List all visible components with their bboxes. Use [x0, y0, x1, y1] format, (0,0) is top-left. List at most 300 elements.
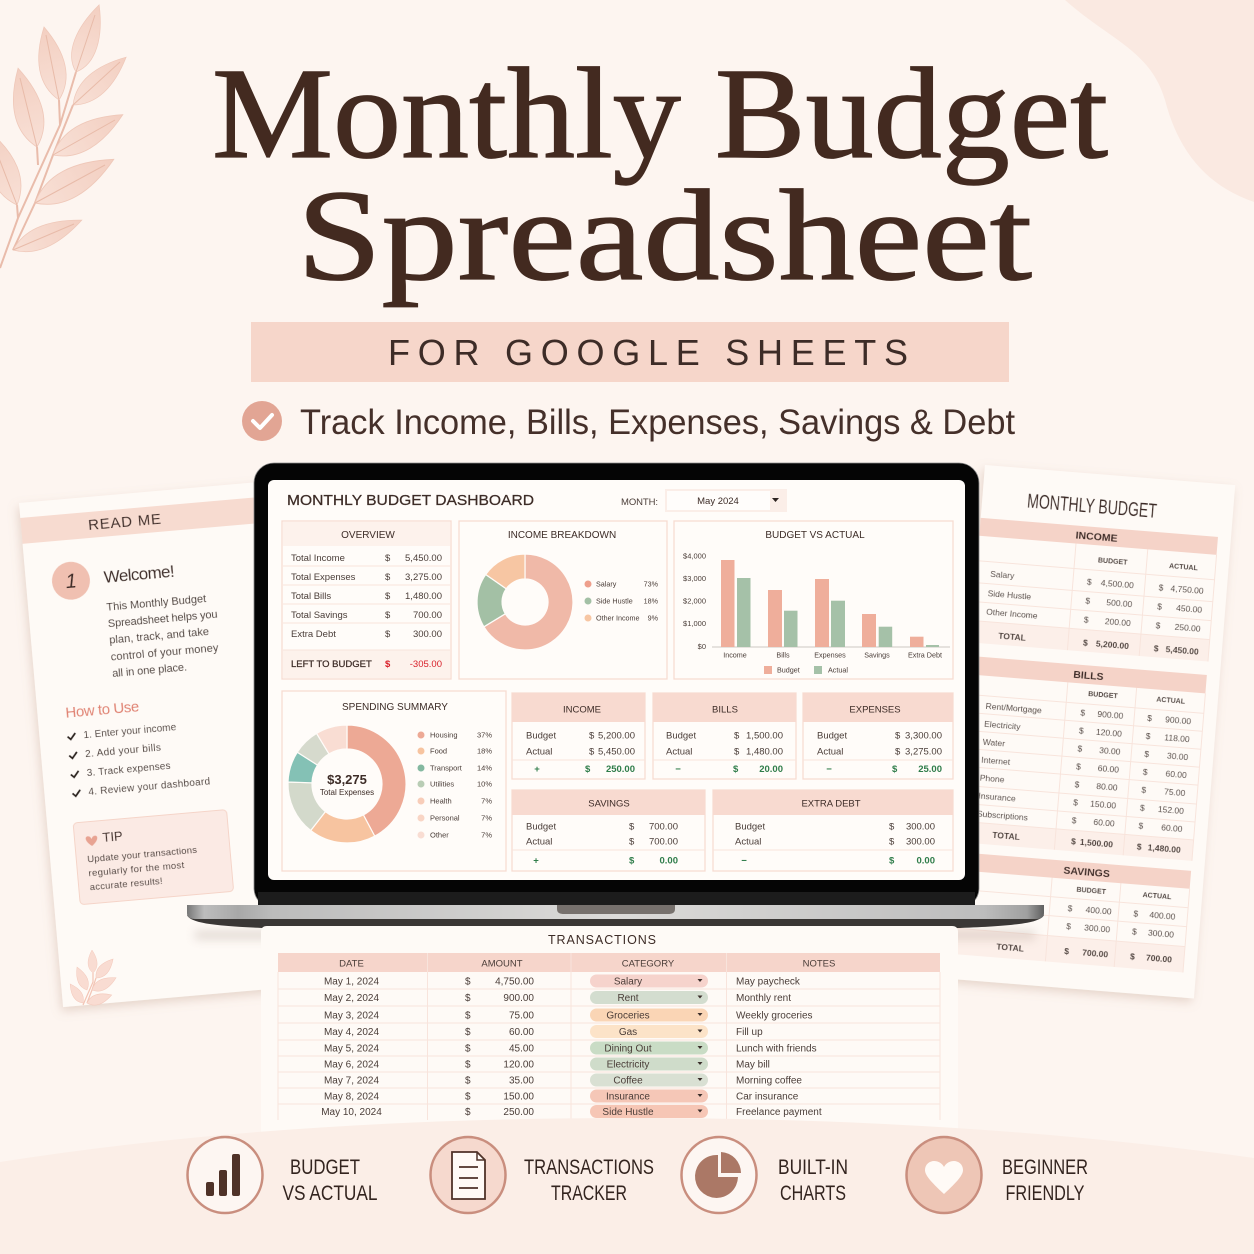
- table: income: ACTUAL: [1169, 563, 1199, 572]
- table: bills: Rent/Mortgage: [985, 701, 1042, 715]
- card: extra debt: 300.00: [906, 836, 935, 848]
- transaction rows: Morning coffee: [736, 1076, 802, 1086]
- panel: income breakdown: INCOME BREAKDOWN: [508, 530, 616, 541]
- table: bills: Insurance: [978, 791, 1016, 804]
- panel: overview: Extra Debt: [291, 629, 336, 640]
- panel: overview: 1,480.00: [405, 591, 442, 602]
- table: income: Salary: [990, 569, 1015, 581]
- table: bills: BUDGET: [1088, 691, 1119, 700]
- icon: leaf branch top left: [0, 1, 134, 268]
- subtitle banner: [251, 322, 1009, 382]
- card: expenses: −: [826, 764, 832, 775]
- panel: read me sheet: 1: [65, 570, 78, 593]
- donut chart: income: [477, 554, 573, 650]
- table: bills: 60.00: [1161, 822, 1183, 834]
- transaction rows: Fill up: [736, 1027, 763, 1038]
- card: bills: $: [733, 764, 739, 775]
- table: savings: BUDGET: [1076, 887, 1107, 896]
- table: bills: $: [1079, 725, 1084, 736]
- transaction rows: 4,750.00: [495, 976, 534, 988]
- card: savings: Actual: [526, 836, 552, 848]
- card: savings: $: [629, 822, 635, 832]
- month selector: MONTH:: [621, 497, 658, 508]
- table: bills: 1,500.00: [1080, 837, 1114, 849]
- table: bills: 900.00: [1097, 709, 1124, 721]
- callout: tip: accurate results!: [89, 876, 163, 893]
- legend: spending: 37%: [477, 730, 492, 740]
- transaction rows: 120.00: [503, 1060, 534, 1070]
- transaction rows: [321, 976, 822, 1118]
- text block: welcome paragraph: all in one place.: [112, 662, 187, 680]
- legend: spending: 7%: [481, 796, 492, 806]
- panel: budget vs actual bar chart: [674, 521, 953, 679]
- feature: built-in charts: [682, 1137, 848, 1213]
- feature: budget vs actual: VS ACTUAL: [282, 1182, 378, 1205]
- text block: welcome paragraph: This Monthly Budget: [106, 593, 207, 614]
- legend: income: 9%: [648, 614, 659, 622]
- transaction rows: Insurance: [606, 1092, 650, 1102]
- card: extra debt: 0.00: [916, 856, 935, 866]
- panel: income breakdown: [459, 521, 667, 679]
- panel: budget vs actual bar chart: BUDGET VS ACTUAL: [765, 530, 865, 541]
- card: income: $: [589, 746, 595, 758]
- table: savings: $: [1066, 921, 1072, 931]
- table: income: $: [1153, 643, 1159, 654]
- table: savings: TOTAL: [996, 941, 1024, 954]
- legend: spending: Utilities: [430, 780, 454, 788]
- transaction rows: Groceries: [606, 1010, 650, 1022]
- laptop: [187, 463, 1044, 939]
- panel: budget vs actual bar chart: $4,000: [683, 552, 706, 560]
- card: extra debt: −: [741, 856, 747, 866]
- panel: transactions sheet: CATEGORY: [622, 958, 675, 970]
- legend: spending: 7%: [481, 830, 492, 840]
- table: bills: 60.00: [1093, 817, 1115, 829]
- transaction rows: May 2, 2024: [324, 993, 379, 1004]
- panel: overview: $: [385, 629, 391, 640]
- table: bills: Subscriptions: [977, 808, 1028, 823]
- legend: spending: Food: [430, 746, 447, 756]
- text block: welcome paragraph: control of your money: [110, 642, 219, 664]
- table: bills: $: [1140, 803, 1145, 813]
- card: income: 250.00: [606, 764, 635, 775]
- card: expenses: Actual: [817, 746, 843, 758]
- card: bills: 20.00: [759, 764, 783, 775]
- table: bills: $: [1073, 797, 1079, 808]
- panel: transactions sheet: AMOUNT: [481, 958, 523, 970]
- legend: spending: 10%: [477, 780, 492, 788]
- icon: document: [430, 1137, 506, 1213]
- table: bills: Internet: [981, 755, 1011, 767]
- icon: bar chart: [188, 1137, 262, 1213]
- panel: overview: $: [385, 610, 391, 621]
- transaction rows: $: [465, 1027, 471, 1038]
- table: bills: 60.00: [1165, 768, 1187, 780]
- category pills: [590, 974, 708, 1118]
- table: savings: 400.00: [1149, 910, 1176, 922]
- panel: overview: $: [385, 591, 391, 602]
- table: bills: TOTAL: [992, 830, 1020, 842]
- panel: transactions sheet: DATE: [339, 958, 364, 970]
- table: income: $: [1085, 596, 1091, 606]
- panel: overview: 700.00: [413, 610, 442, 621]
- table: bills: $: [1074, 779, 1080, 790]
- card: expenses: $: [895, 730, 901, 742]
- card: expenses: 3,300.00: [905, 730, 942, 742]
- icon: heart: [906, 1137, 982, 1213]
- table: income: $: [1087, 577, 1092, 587]
- panel: read me sheet: How to Use: [65, 698, 140, 722]
- panel: spending summary: SPENDING SUMMARY: [342, 702, 448, 713]
- panel: overview: $: [385, 572, 391, 583]
- bars: budget: [721, 560, 924, 647]
- table: bills: 900.00: [1165, 714, 1192, 726]
- table: bills: $: [1071, 815, 1077, 825]
- transaction rows: May 7, 2024: [324, 1076, 379, 1086]
- table: savings: 700.00: [1146, 953, 1173, 965]
- table: bills: 118.00: [1164, 732, 1190, 744]
- callout: tip: regularly for the most: [88, 860, 185, 879]
- transaction rows: May 6, 2024: [324, 1060, 379, 1070]
- panel: overview: Total Income: [291, 553, 345, 564]
- transaction rows: May 4, 2024: [324, 1027, 379, 1038]
- transaction rows: 45.00: [509, 1044, 534, 1054]
- card: extra debt: EXTRA DEBT: [801, 798, 861, 810]
- card: income: $: [589, 730, 595, 742]
- laptop base: [187, 905, 1044, 928]
- table: bills: $: [1076, 761, 1082, 772]
- card: bills: 1,500.00: [746, 730, 783, 742]
- transaction rows: 35.00: [509, 1076, 534, 1086]
- table: bills: 75.00: [1164, 786, 1186, 798]
- legend: spending: Other: [430, 830, 449, 840]
- legend: spending: 7%: [481, 814, 492, 822]
- transaction rows: 250.00: [503, 1107, 534, 1118]
- checklist: 3. Track expenses: [86, 761, 171, 779]
- feature: budget vs actual: BUDGET: [290, 1156, 360, 1179]
- legend: spending: Housing: [430, 730, 458, 740]
- legend: income: [584, 580, 659, 622]
- card: expenses: 3,275.00: [905, 746, 942, 758]
- card: expenses: $: [892, 764, 898, 775]
- transaction rows: Rent: [617, 993, 639, 1004]
- panel: spending summary: $3,275: [327, 772, 367, 787]
- panel: monthly budget sheet: [944, 465, 1235, 998]
- transaction rows: Side Hustle: [602, 1107, 654, 1118]
- title: [212, 42, 1108, 308]
- panel: monthly budget sheet: MONTHLY BUDGET: [1026, 491, 1158, 523]
- card: savings: $: [629, 836, 635, 848]
- card: bills: $: [734, 746, 740, 758]
- transaction rows: $: [465, 1010, 471, 1022]
- card: income: +: [534, 764, 540, 775]
- card: income: [512, 693, 645, 779]
- panel: overview: Total Bills: [291, 591, 331, 602]
- transaction rows: Salary: [614, 976, 642, 988]
- legend: spending: 18%: [477, 746, 492, 756]
- table: bills: 120.00: [1096, 727, 1123, 739]
- panel: budget vs actual bar chart: Expenses: [814, 650, 846, 660]
- text block: welcome paragraph: [106, 592, 222, 680]
- panel: dashboard screen: MONTHLY BUDGET DASHBOARD: [287, 492, 534, 509]
- table: savings: 700.00: [1082, 947, 1109, 959]
- table: savings: $: [1067, 903, 1073, 913]
- transaction rows: Electricity: [607, 1060, 649, 1070]
- feature: budget vs actual: [188, 1137, 378, 1213]
- table: savings: ACTUAL: [1142, 892, 1172, 901]
- table: bills: Phone: [980, 773, 1005, 785]
- title: Spreadsheet: [297, 164, 1032, 308]
- panel: budget vs actual bar chart: Bills: [776, 650, 790, 660]
- transaction rows: Gas: [619, 1027, 637, 1038]
- panel: overview: $: [385, 659, 391, 670]
- card: bills: $: [734, 730, 740, 742]
- checklist: 2. Add your bills: [85, 743, 161, 760]
- transaction rows: $: [465, 1044, 471, 1054]
- table: income: 450.00: [1176, 603, 1203, 615]
- panel: overview: OVERVIEW: [341, 530, 395, 541]
- legend: income: Side Hustle: [596, 596, 633, 606]
- checklist: 1. Enter your income: [83, 722, 177, 741]
- table: income: 5,450.00: [1165, 644, 1199, 657]
- table: income: 5,200.00: [1096, 638, 1130, 651]
- card: expenses: Budget: [817, 730, 847, 742]
- panel: read me sheet: [19, 477, 362, 1007]
- callout: tip: Update your transactions: [87, 845, 198, 865]
- card: expenses: EXPENSES: [849, 704, 901, 716]
- transaction rows: 60.00: [509, 1027, 534, 1038]
- feature: built-in charts: BUILT-IN: [778, 1156, 848, 1179]
- panel: overview: 3,275.00: [405, 572, 442, 583]
- transaction rows: Car insurance: [736, 1092, 799, 1102]
- table: bills: 60.00: [1097, 763, 1120, 775]
- bars: actual: [737, 578, 939, 647]
- panel: overview: Total Savings: [291, 610, 348, 621]
- card: bills: Actual: [666, 746, 692, 758]
- card: savings: +: [533, 856, 539, 866]
- transaction rows: Weekly groceries: [736, 1010, 813, 1022]
- table: bills: [955, 656, 1207, 861]
- card: income: Actual: [526, 746, 552, 758]
- table: income: $: [1084, 614, 1089, 625]
- transaction rows: $: [465, 976, 471, 988]
- table: savings: 400.00: [1085, 905, 1112, 917]
- card: savings: 0.00: [660, 856, 678, 866]
- transaction rows: 900.00: [503, 993, 534, 1004]
- table: bills: Electricity: [984, 719, 1022, 732]
- callout: tip: TIP: [102, 828, 123, 845]
- feature: transactions tracker: TRANSACTIONS: [524, 1156, 654, 1179]
- card: extra debt: 300.00: [906, 822, 935, 832]
- subtitle banner: FOR GOOGLE SHEETS: [388, 332, 908, 373]
- transaction rows: May 1, 2024: [324, 976, 379, 988]
- table: savings: $: [1064, 946, 1070, 956]
- card: savings: 700.00: [649, 836, 678, 848]
- transaction rows: May 10, 2024: [321, 1107, 382, 1118]
- card: savings: SAVINGS: [588, 798, 630, 810]
- table: income: Side Hustle: [987, 588, 1032, 602]
- table: income: 200.00: [1104, 616, 1131, 628]
- icon: pie chart: [682, 1137, 756, 1213]
- icon: small leaf on read me sheet: [66, 950, 118, 1008]
- panel: dashboard screen: [268, 480, 965, 880]
- table: bills: $: [1147, 713, 1153, 723]
- panel: overview: -305.00: [410, 659, 442, 670]
- table: bills: $: [1143, 767, 1148, 777]
- table: bills: $: [1141, 785, 1147, 795]
- panel: budget vs actual bar chart: $3,000: [683, 574, 706, 583]
- table: bills: 30.00: [1167, 751, 1189, 762]
- table: income: 4,750.00: [1170, 583, 1204, 596]
- table: income: $: [1155, 620, 1161, 631]
- card: expenses: $: [895, 746, 901, 758]
- panel: overview: [282, 521, 451, 679]
- panel: transactions sheet: [261, 926, 958, 1140]
- transaction rows: Freelance payment: [736, 1107, 822, 1118]
- card: savings: $: [629, 856, 635, 866]
- transaction rows: $: [465, 1060, 471, 1070]
- panel: transactions sheet: TRANSACTIONS: [548, 933, 656, 947]
- table: income: $: [1158, 582, 1164, 593]
- table: bills: $: [1145, 731, 1151, 741]
- feature: beginner friendly: FRIENDLY: [1006, 1182, 1084, 1205]
- feature: transactions tracker: TRACKER: [551, 1182, 627, 1205]
- table: income: $: [1083, 637, 1088, 648]
- laptop bezel: [254, 463, 979, 908]
- panel: budget vs actual bar chart: Savings: [864, 650, 890, 660]
- legend: spending: [418, 730, 492, 840]
- feature: beginner friendly: [906, 1137, 1088, 1213]
- card: income: INCOME: [563, 704, 601, 716]
- table: income: [971, 518, 1218, 662]
- table: bills: $: [1136, 841, 1142, 852]
- checklist: [67, 720, 211, 799]
- legend: spending: Personal: [430, 814, 460, 822]
- feature: transactions tracker: [430, 1137, 654, 1213]
- panel: overview: $: [385, 553, 391, 564]
- table: income: 500.00: [1106, 597, 1133, 609]
- legend: spending: Health: [430, 796, 452, 806]
- table: bills: 150.00: [1090, 799, 1117, 811]
- panel: overview: LEFT TO BUDGET: [291, 659, 372, 670]
- table: income: Other Income: [986, 607, 1038, 621]
- feature: built-in charts: CHARTS: [780, 1182, 846, 1205]
- panel: budget vs actual bar chart: $0: [698, 642, 706, 651]
- card: income: 5,200.00: [598, 730, 635, 742]
- table: bills: 30.00: [1099, 745, 1121, 757]
- table: savings: 300.00: [1084, 922, 1111, 935]
- panel: spending summary: [282, 691, 506, 871]
- table: income: TOTAL: [998, 631, 1026, 643]
- card: extra debt: $: [889, 856, 895, 866]
- card: extra debt: Actual: [735, 836, 761, 848]
- legend: income: Salary: [596, 580, 617, 588]
- panel: budget vs actual bar chart: Extra Debt: [908, 650, 942, 660]
- card: extra debt: [713, 790, 953, 871]
- card: income: Budget: [526, 730, 556, 742]
- panel: budget vs actual bar chart: Income: [723, 650, 747, 660]
- card: bills: −: [675, 764, 681, 775]
- text block: welcome paragraph: plan, track, and take: [109, 626, 209, 647]
- panel: overview: 300.00: [413, 629, 442, 640]
- card: savings: Budget: [526, 822, 556, 832]
- card: extra debt: $: [889, 836, 895, 848]
- legend: income: 73%: [644, 580, 659, 588]
- month selector: May 2024: [697, 496, 739, 507]
- card: income: 5,450.00: [598, 746, 635, 758]
- transaction rows: $: [465, 1107, 471, 1118]
- title: Monthly Budget: [212, 42, 1108, 186]
- donut chart: spending: [288, 725, 406, 843]
- table: income: 250.00: [1174, 622, 1201, 634]
- panel: overview: 5,450.00: [405, 553, 442, 564]
- table: savings: SAVINGS: [1063, 865, 1110, 880]
- table: income: $: [1157, 601, 1163, 612]
- legend: income: Other Income: [596, 614, 640, 622]
- table: savings: $: [1130, 951, 1135, 962]
- transaction rows: May 8, 2024: [324, 1092, 379, 1102]
- transaction rows: $: [465, 1076, 471, 1086]
- panel: overview: Total Expenses: [291, 572, 356, 583]
- month selector: [621, 489, 787, 512]
- card: bills: 1,480.00: [746, 746, 783, 758]
- transaction rows: Lunch with friends: [736, 1044, 817, 1054]
- table: savings: $: [1132, 926, 1137, 937]
- checklist: 4. Review your dashboard: [88, 776, 211, 798]
- table: bills: 1,480.00: [1147, 842, 1181, 855]
- card: bills: Budget: [666, 730, 696, 742]
- table: income: INCOME: [1075, 530, 1118, 545]
- transaction rows: 150.00: [503, 1092, 534, 1102]
- panel: read me sheet: READ ME: [87, 511, 162, 534]
- transaction rows: $: [465, 1092, 471, 1102]
- panel: budget vs actual bar chart: $2,000: [683, 596, 706, 606]
- legend: bars: Actual: [828, 666, 848, 674]
- legend: income: 18%: [644, 596, 659, 606]
- decorative blob top right: [1065, 0, 1254, 202]
- card: extra debt: $: [889, 822, 895, 832]
- transaction rows: $: [465, 993, 471, 1004]
- transaction rows: May bill: [736, 1060, 770, 1070]
- transaction rows: May paycheck: [736, 976, 801, 988]
- panel: spending summary: Total Expenses: [320, 788, 374, 797]
- transaction rows: May 5, 2024: [324, 1044, 379, 1054]
- feature: beginner friendly: BEGINNER: [1002, 1156, 1088, 1179]
- card: extra debt: Budget: [735, 822, 765, 832]
- panel: transactions sheet: NOTES: [803, 958, 835, 970]
- transaction rows: Monthly rent: [736, 993, 791, 1004]
- panel: read me sheet: Welcome!: [103, 562, 175, 587]
- table: income: 4,500.00: [1100, 578, 1134, 590]
- card: bills: BILLS: [712, 704, 738, 716]
- table: savings: $: [1133, 908, 1139, 919]
- table: bills: $: [1144, 749, 1150, 759]
- table: bills: 152.00: [1158, 804, 1185, 816]
- table: bills: BILLS: [1073, 669, 1104, 683]
- table: savings: [946, 852, 1191, 973]
- text block: welcome paragraph: Spreadsheet helps you: [107, 609, 218, 630]
- card: bills: [653, 693, 796, 779]
- table: bills: $: [1080, 707, 1086, 718]
- card: expenses: [803, 693, 953, 779]
- transaction rows: May 3, 2024: [324, 1010, 379, 1022]
- transaction rows: 75.00: [509, 1010, 534, 1022]
- table: bills: ACTUAL: [1156, 697, 1186, 706]
- transaction rows: Coffee: [613, 1076, 643, 1086]
- card: savings: [512, 790, 705, 871]
- legend: spending: Transport: [430, 764, 463, 772]
- table: bills: Water: [982, 737, 1006, 749]
